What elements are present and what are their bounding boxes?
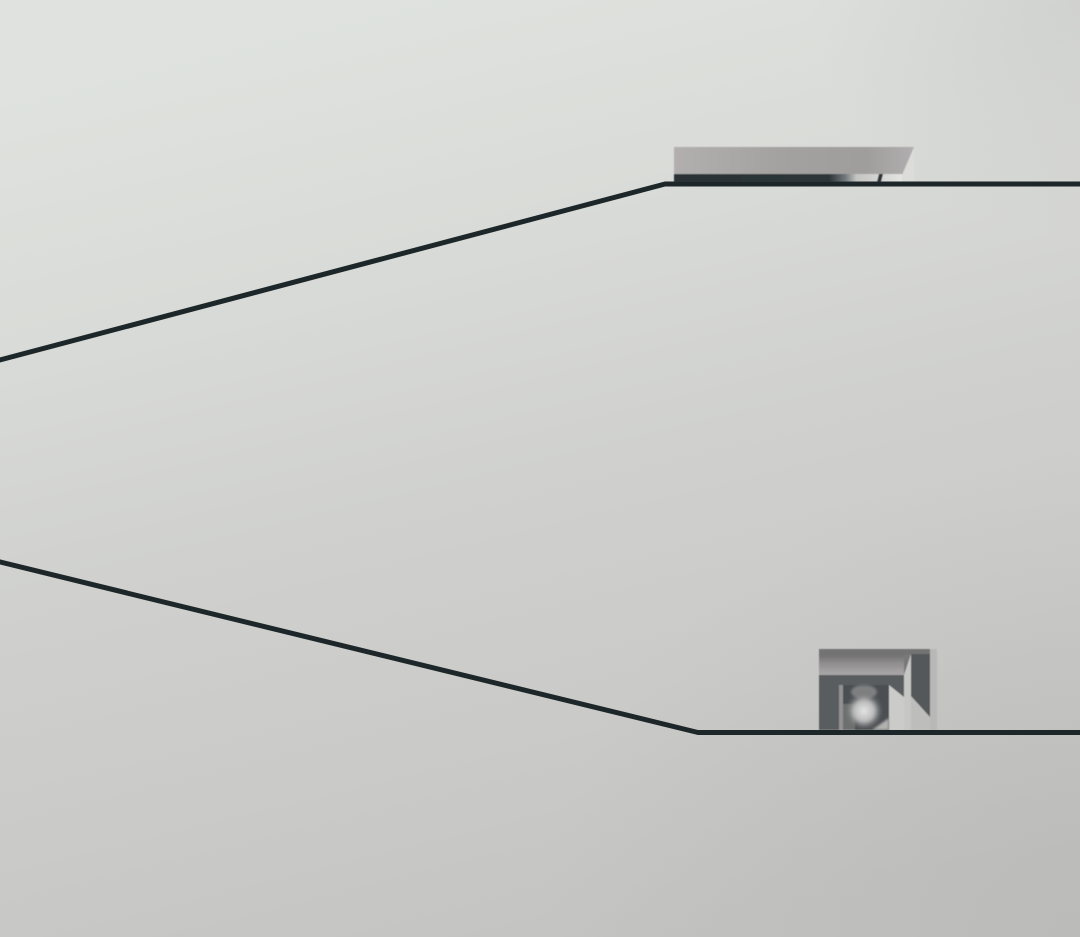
upper black line: [0, 184, 1080, 360]
lower black line: [0, 562, 1080, 732]
upper recessed window: [674, 147, 914, 182]
lower recessed window: [819, 649, 937, 730]
light glow inside lower window: [845, 685, 889, 730]
